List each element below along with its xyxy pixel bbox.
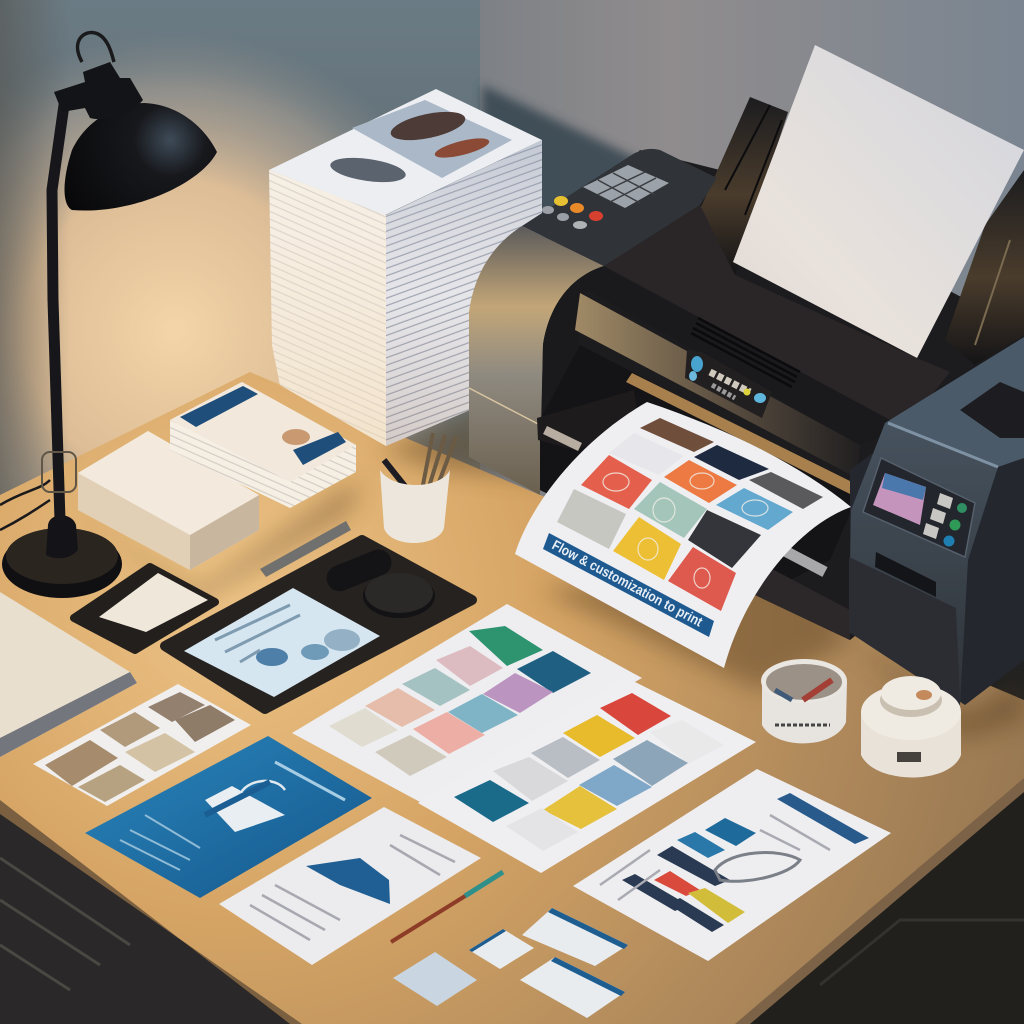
printer lower front xyxy=(755,560,850,640)
tan front panel xyxy=(575,293,860,478)
top panel xyxy=(522,149,717,266)
tablet large xyxy=(165,540,472,709)
business card box xyxy=(78,431,259,570)
control bezel xyxy=(863,458,975,557)
wall: left xyxy=(0,0,482,520)
feed paper xyxy=(733,45,1024,358)
printer body xyxy=(469,45,1024,640)
control keypad xyxy=(583,165,669,208)
device screen xyxy=(873,473,926,525)
wall shadow behind printer xyxy=(482,85,640,260)
vent slots xyxy=(691,318,800,387)
print colour grid xyxy=(557,418,823,611)
marker pen xyxy=(391,872,503,942)
line icons on grid xyxy=(603,473,768,588)
printed sheet emerging from printer xyxy=(515,402,851,668)
desk top xyxy=(0,372,1024,1024)
small cards xyxy=(393,908,628,1018)
blue brochure xyxy=(85,736,372,898)
desk underside xyxy=(0,790,1024,1024)
roller ends xyxy=(537,390,825,572)
stack of printed sheets xyxy=(269,89,542,446)
silver side seam xyxy=(469,388,540,425)
coloured buttons xyxy=(542,196,603,229)
lamp shade xyxy=(64,103,217,211)
photo sheet xyxy=(33,684,251,806)
paper tray xyxy=(680,97,788,275)
design sheet right xyxy=(418,677,756,873)
printer left silver side xyxy=(469,226,604,495)
top black surface xyxy=(604,205,950,428)
output slot xyxy=(875,552,936,597)
device top xyxy=(885,337,1024,467)
printer dark base xyxy=(540,150,1024,640)
object shadows on desk xyxy=(80,390,1024,740)
stack image panel xyxy=(352,100,512,178)
design sheet left xyxy=(292,604,642,802)
device buttons xyxy=(923,493,967,546)
small cup xyxy=(761,659,847,743)
right printer unit xyxy=(849,337,1024,705)
desk lamp xyxy=(0,32,217,598)
desk front edge xyxy=(0,800,302,1024)
brochure card stack xyxy=(170,382,356,508)
tablet small xyxy=(74,567,215,650)
device front xyxy=(849,423,998,705)
printer front fascia xyxy=(580,268,905,445)
gold rail xyxy=(626,373,860,497)
pencil cup xyxy=(380,433,456,543)
paper roller slot xyxy=(540,345,860,595)
highlight line xyxy=(888,423,998,467)
infographic sheet bottom right xyxy=(573,769,891,961)
device side xyxy=(850,340,1024,705)
rear tray right xyxy=(945,170,1024,365)
wall: right xyxy=(480,0,1024,520)
black side bezel xyxy=(540,266,604,470)
folder left xyxy=(0,592,137,757)
white brochure xyxy=(219,807,481,965)
lidded jar xyxy=(861,676,961,778)
status panel xyxy=(685,350,772,418)
pen xyxy=(260,521,351,577)
banner with title: Flow & customization to print xyxy=(550,537,706,630)
stack top sheet xyxy=(269,89,542,215)
